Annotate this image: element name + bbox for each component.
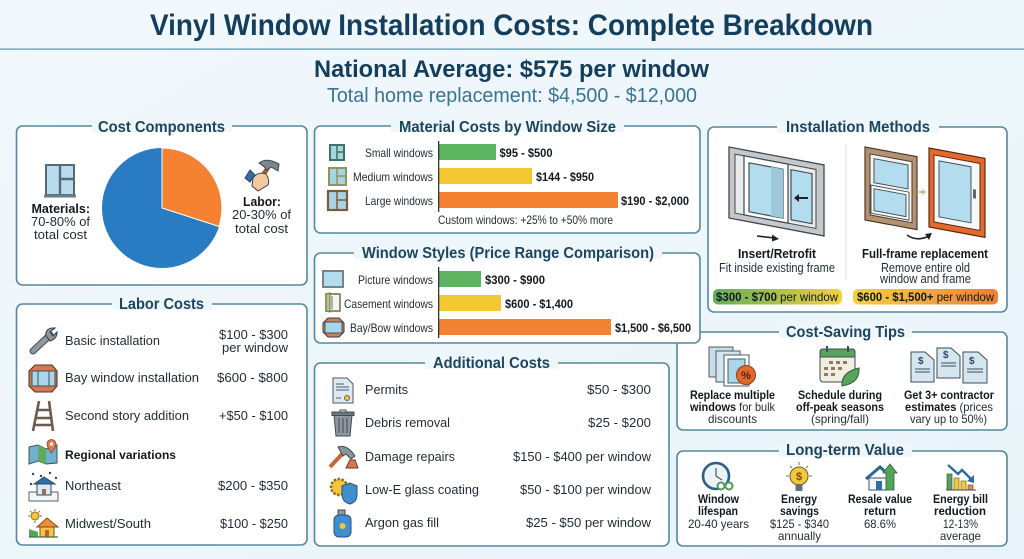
icon: medium window (329, 168, 346, 185)
icon: large window (328, 191, 347, 210)
row: low-e glass coating: Low-E glass coating (365, 482, 479, 497)
value: energy savings: annually (778, 529, 821, 543)
row: debris removal (365, 415, 651, 430)
panel: labor costs (16, 296, 307, 545)
heading: long-term value: Long-term Value (786, 442, 904, 459)
materials label: Materials: (32, 201, 90, 216)
value: window lifespan: 20-40 years (688, 517, 749, 531)
bar chart: material costs: $144 - $950 (536, 170, 594, 184)
icon: house with up arrow (866, 464, 897, 490)
heading: material costs: Material Costs by Window Size (399, 119, 616, 136)
pie chart (102, 148, 222, 268)
row: northeast (65, 478, 288, 493)
icon: permit document (333, 378, 353, 403)
value: energy bill reduction: Energy bill (933, 492, 988, 506)
row: basic installation (65, 327, 289, 355)
value: energy savings: Energy (781, 492, 817, 506)
row: bay window installation: Bay window installation (65, 370, 199, 385)
row: low-e glass coating: $50 - $100 per window (520, 482, 652, 497)
row: permits: $50 - $300 (587, 382, 651, 397)
value: energy savings: $125 - $340 (770, 517, 829, 531)
total home replacement subheading: Total home replacement: $4,500 - $12,000 (327, 85, 697, 107)
label: full-frame replacement: Remove entire old (881, 261, 970, 275)
value: energy savings (770, 492, 829, 543)
panel: long-term value (677, 442, 1007, 546)
row: second story addition (65, 408, 288, 423)
row: debris removal: Debris removal (365, 415, 450, 430)
icon: window (44, 165, 76, 198)
icon: trash can (332, 410, 354, 436)
bar chart: window styles: Picture windows (358, 273, 433, 287)
row: second story addition: +$50 - $100 (219, 408, 288, 423)
icon: argon gas canister (334, 510, 351, 537)
bar chart: material costs: Medium windows (353, 170, 433, 184)
row: damage repairs: $150 - $400 per window (513, 449, 652, 464)
label: full-frame replacement: window and frame (879, 272, 971, 286)
row: northeast: $200 - $350 (218, 478, 288, 493)
tip: replace multiple windows: windows for bulk (689, 400, 776, 414)
value: energy savings: savings (780, 504, 819, 518)
row: permits (365, 382, 651, 397)
icon: clock with infinity (703, 463, 732, 490)
label: insert/retrofit: Fit inside existing frame (719, 261, 835, 275)
value: resale value return: Resale value (848, 492, 912, 506)
row: debris removal: $25 - $200 (588, 415, 651, 430)
icon: snowy house (29, 472, 58, 501)
bar chart: window styles: $600 - $1,400 (505, 297, 573, 311)
bar chart: material costs: Small windows (365, 146, 433, 160)
bar chart: material costs (353, 141, 689, 212)
tip: get 3+ contractor estimates: vary up to 50%) (910, 412, 987, 426)
tip: get 3+ contractor estimates (904, 388, 994, 426)
value: energy bill reduction: average (940, 529, 981, 543)
panel: cost-saving tips (677, 324, 1007, 430)
icon: sunny house (28, 509, 58, 537)
panel: cost components (16, 119, 307, 285)
bar chart: window styles: Casement windows (344, 297, 433, 311)
bar chart: window styles: $1,500 - $6,500 (615, 321, 691, 335)
tip: replace multiple windows: discounts (708, 412, 757, 426)
row: argon gas fill (365, 515, 652, 530)
labor label: Labor: (243, 194, 281, 209)
row: damage repairs: Damage repairs (365, 449, 455, 464)
icon: stacked windows with discount badge (709, 347, 756, 386)
panel: material costs by window size (314, 119, 700, 233)
panel: additional costs (314, 355, 669, 546)
tip: schedule during off-peak seasons (796, 388, 884, 426)
bar chart: window styles (344, 267, 691, 338)
row: basic installation: $100 - $300 (219, 327, 288, 342)
label: insert/retrofit: Insert/Retrofit (738, 246, 817, 261)
icon: map pin (29, 440, 57, 464)
labor label: 20-30% of (232, 207, 291, 222)
row: bay window installation (65, 370, 288, 385)
tip: get 3+ contractor estimates: estimates (prices (905, 400, 993, 414)
icon: light bulb with dollar (786, 462, 812, 491)
tip: schedule during off-peak seasons: (spring/fall) (811, 412, 869, 426)
materials label: total cost (34, 227, 87, 242)
value: window lifespan: Window (698, 492, 740, 506)
icon: stacked windows with discount badge: % (741, 370, 751, 382)
heading: additional costs: Additional Costs (433, 355, 550, 372)
row: argon gas fill: $25 - $50 per window (526, 515, 652, 530)
value: energy bill reduction: reduction (934, 504, 986, 518)
label: insert/retrofit (719, 246, 835, 275)
price pill: insert: $300 - $700 per window (716, 290, 838, 304)
illustration: full-frame replacement windows (865, 147, 985, 240)
row: bay window installation: $600 - $800 (217, 370, 288, 385)
row: damage repairs (365, 449, 652, 464)
row: northeast: Northeast (65, 478, 121, 493)
icon: hammer repair (330, 446, 358, 468)
label: full-frame replacement: Full-frame replacement (862, 246, 989, 261)
illustration: insert/retrofit window (729, 147, 824, 242)
value: window lifespan: lifespan (698, 504, 738, 518)
value: resale value return (848, 492, 912, 531)
panel: installation methods (708, 119, 1007, 312)
labor label: total cost (235, 221, 288, 236)
row: regional variations: Regional variations (65, 448, 176, 462)
icon: sun and shield (331, 479, 357, 504)
bar chart: window styles: $300 - $900 (485, 273, 545, 287)
materials label (31, 201, 90, 242)
tip: replace multiple windows (689, 388, 776, 426)
icon: contractor estimates: $ (969, 356, 975, 367)
note: custom windows: Custom windows: +25% to +50% more (438, 213, 613, 227)
row: low-e glass coating (365, 482, 652, 497)
title: Vinyl Window Installation Costs: Complete Breakdown (150, 9, 873, 42)
value: resale value return: return (864, 504, 896, 518)
icon: bay window (323, 318, 344, 337)
bar chart: material costs: $95 - $500 (500, 146, 553, 160)
national average headline: National Average: $575 per window (314, 56, 709, 83)
icon: calendar with leaf (820, 346, 859, 386)
row: second story addition: Second story addition (65, 408, 189, 423)
icon: falling bills chart (946, 465, 976, 490)
row: midwest/south: $100 - $250 (220, 516, 288, 531)
icon: hand with hammer (245, 160, 279, 191)
panel: window styles (314, 245, 700, 343)
icon: picture window (323, 271, 343, 287)
icon: small window (330, 145, 344, 160)
tip: replace multiple windows: Replace multiple (690, 388, 775, 402)
heading: window styles: Window Styles (Price Range Comparison) (362, 245, 654, 262)
tip: get 3+ contractor estimates: Get 3+ contractor (904, 388, 994, 402)
heading: labor costs: Labor Costs (119, 296, 204, 313)
value: energy bill reduction (933, 492, 988, 543)
price pill: full-frame: $600 - $1,500+ per window (857, 290, 994, 304)
heading: installation methods: Installation Methods (786, 119, 930, 136)
row: argon gas fill: Argon gas fill (365, 515, 439, 530)
value: window lifespan (688, 492, 749, 531)
value: energy bill reduction: 12-13% (943, 517, 978, 531)
row: midwest/south (65, 516, 288, 531)
heading: cost-saving tips: Cost-Saving Tips (786, 324, 905, 341)
icon: ladder (33, 401, 53, 431)
row: midwest/south: Midwest/South (65, 516, 151, 531)
icon: contractor estimates (911, 348, 987, 383)
labor label (232, 194, 291, 236)
row: basic installation: Basic installation (65, 333, 160, 348)
icon: contractor estimates: $ (943, 350, 949, 361)
value: resale value return: 68.6% (864, 517, 896, 531)
materials label: 70-80% of (31, 214, 90, 229)
row: basic installation: per window (222, 340, 289, 355)
icon: contractor estimates: $ (918, 356, 924, 367)
icon: bay window (29, 365, 57, 392)
tip: schedule during off-peak seasons: off-peak seasons (796, 400, 884, 414)
icon: wrench (33, 328, 57, 351)
heading: cost components: Cost Components (98, 119, 225, 136)
icon: light bulb with dollar: $ (796, 471, 802, 483)
bar chart: material costs: $190 - $2,000 (621, 194, 689, 208)
icon: casement window (326, 293, 340, 312)
row: permits: Permits (365, 382, 408, 397)
bar chart: window styles: Bay/Bow windows (350, 321, 433, 335)
tip: schedule during off-peak seasons: Schedule during (798, 388, 882, 402)
label: full-frame replacement (862, 246, 989, 286)
bar chart: material costs: Large windows (365, 194, 433, 208)
